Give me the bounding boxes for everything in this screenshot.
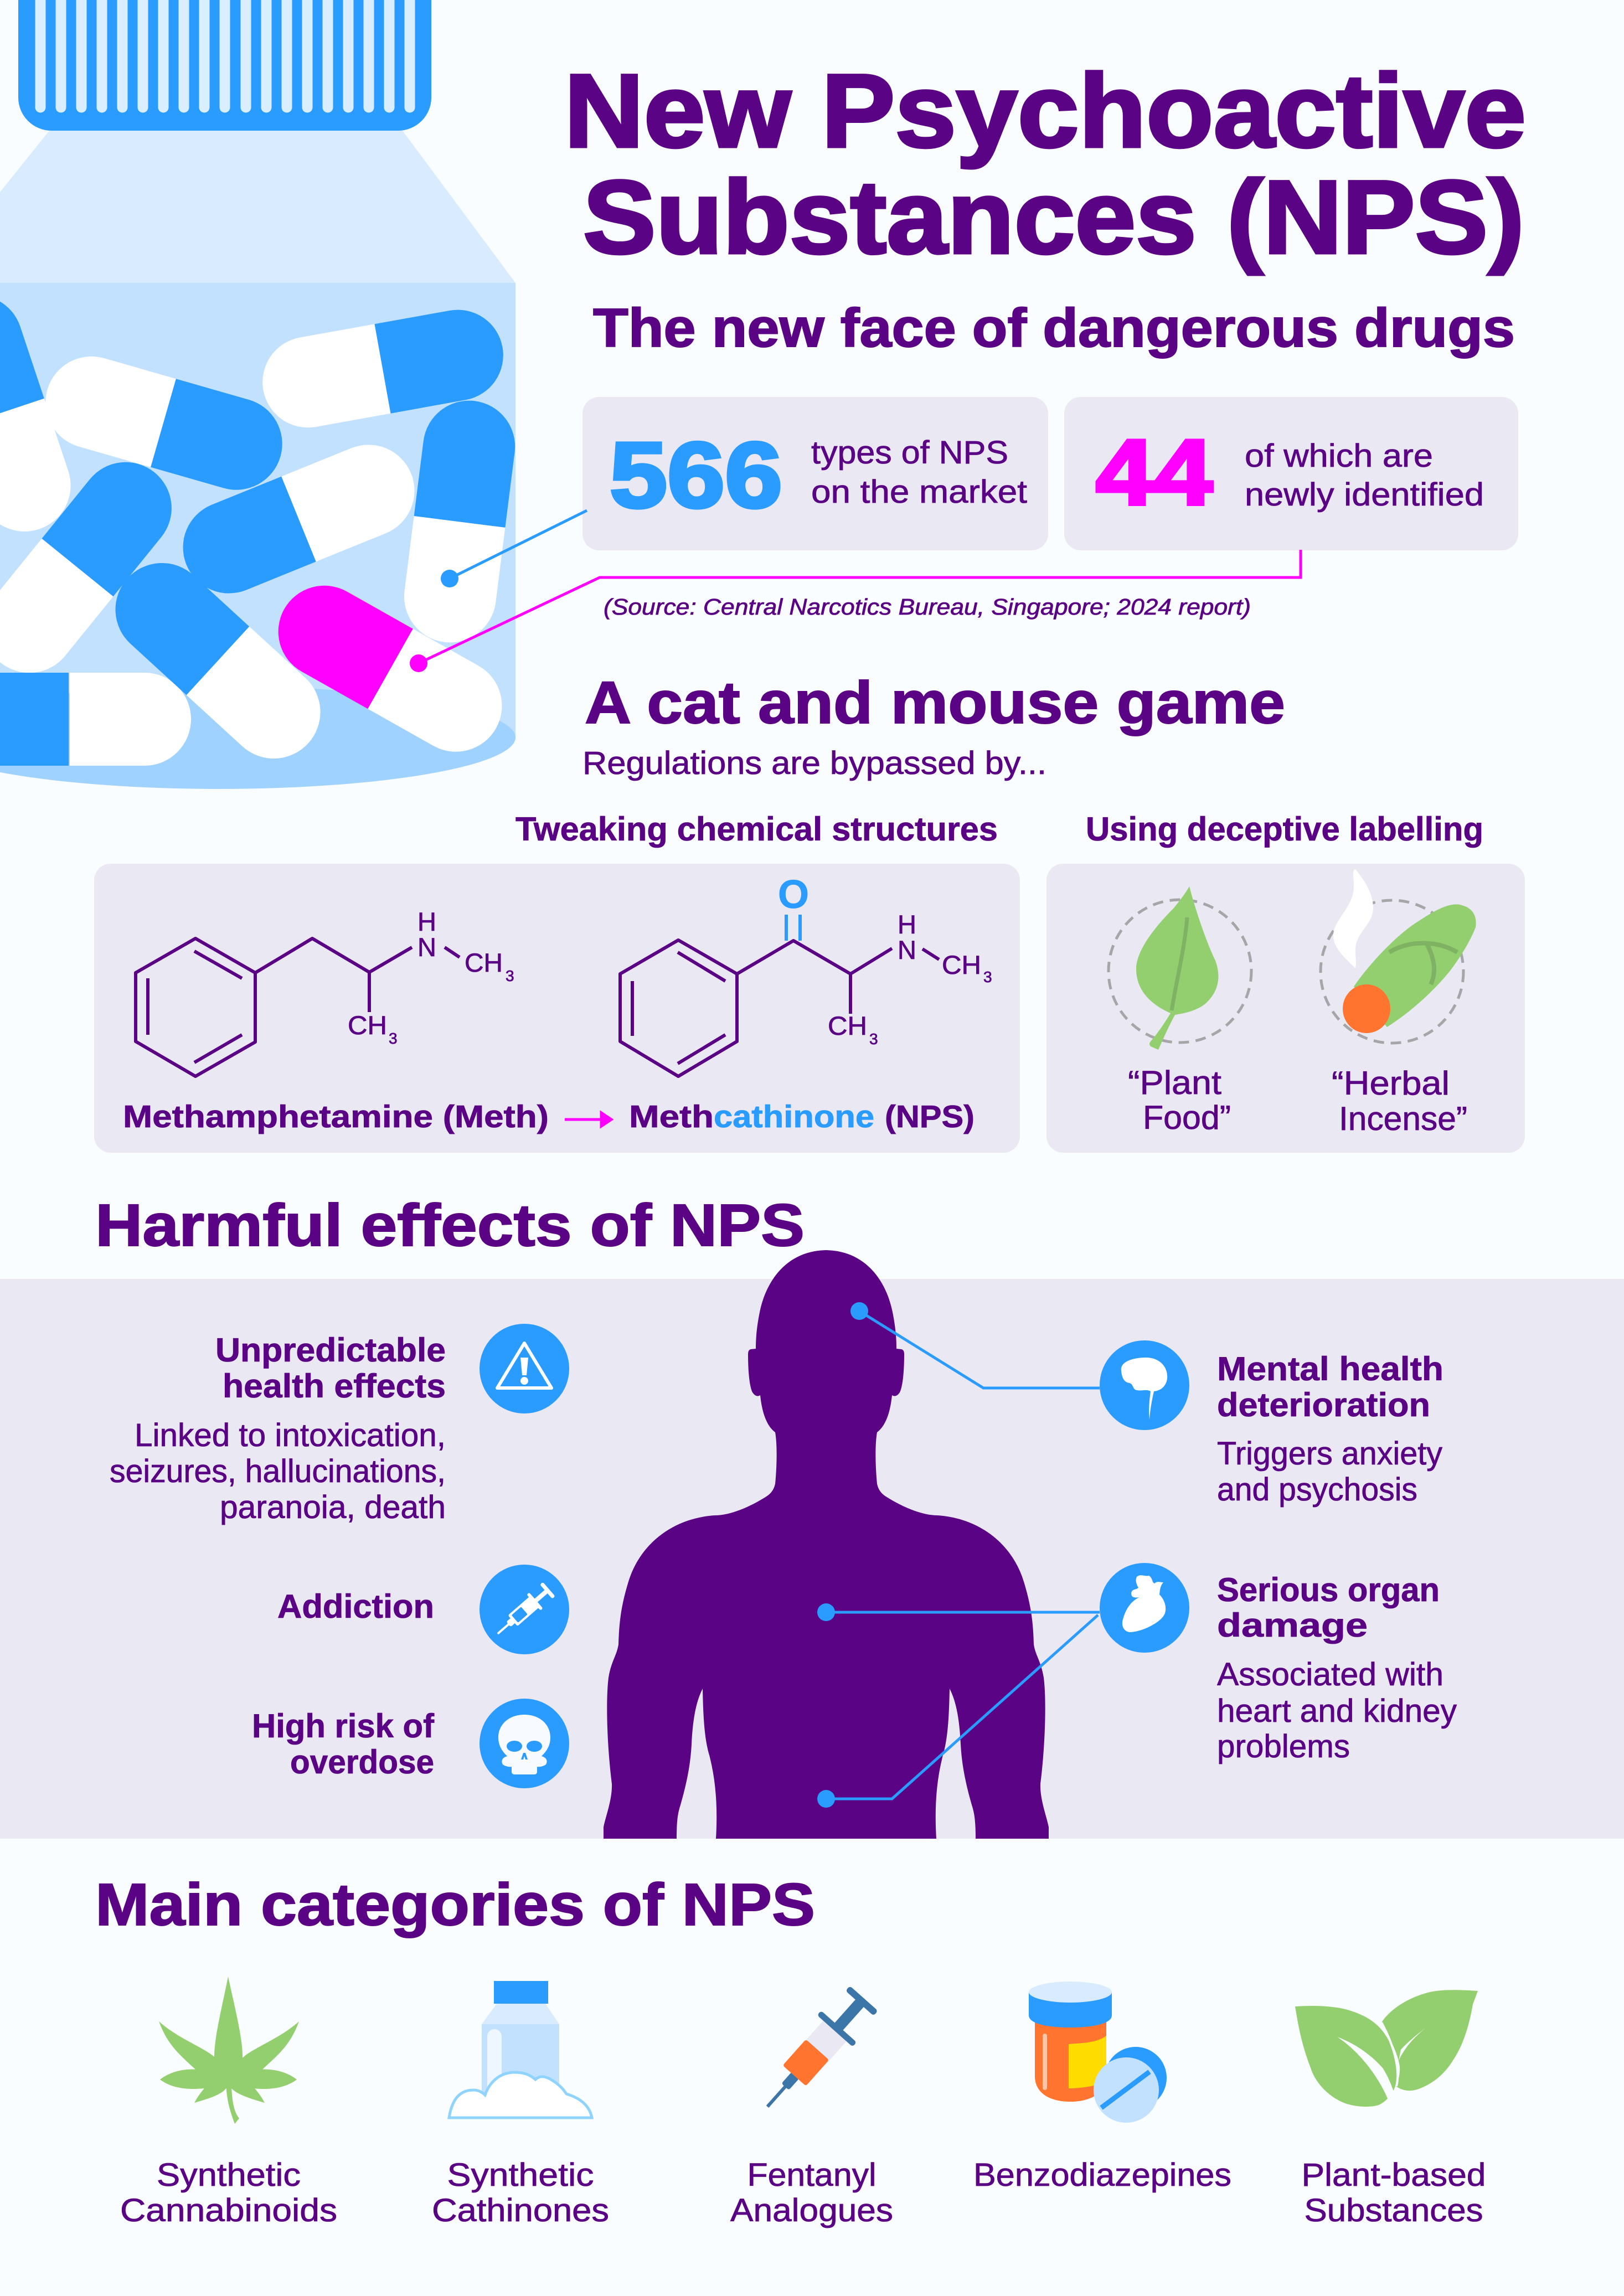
icon: cannabis leaf [159, 1977, 299, 2124]
callout line: blue capsule to 566 [441, 510, 587, 587]
subheading: chemical structures: Tweaking chemical structures [515, 811, 998, 848]
text: high risk of overdose: High risk of [252, 1707, 435, 1745]
label: methamphetamine: Methamphetamine (Meth) [123, 1099, 549, 1134]
molecule: methcathinone: H [898, 910, 916, 939]
capsule [399, 395, 520, 648]
title: New Psychoactive [564, 53, 1526, 169]
human silhouette [604, 1250, 1049, 1839]
molecule: methamphetamine: CH [348, 1010, 387, 1040]
panel: harmful effects band [0, 1279, 1624, 1839]
bottle shoulder [0, 131, 515, 283]
heading: harmful effects: Harmful effects of NPS [95, 1191, 805, 1258]
subtitle: The new face of dangerous drugs [593, 297, 1515, 358]
callout line: magenta capsule to 44 [410, 550, 1301, 672]
text: unpredictable health effects: seizures, hallucinations, [110, 1453, 446, 1489]
panel: deceptive labelling [1046, 864, 1525, 1153]
label: plant food: “Plant [1128, 1064, 1221, 1101]
label: methcathinone: cathinone [714, 1099, 874, 1134]
category: synthetic cannabinoids [120, 1977, 337, 2228]
text: serious organ damage: Serious organ [1217, 1571, 1440, 1608]
label [120, 2157, 337, 2228]
label: methcathinone: Meth [629, 1099, 714, 1134]
label: methcathinone: (NPS) [885, 1099, 975, 1134]
label: plant food [1128, 1064, 1231, 1136]
capsule [255, 302, 511, 435]
panel: 44 newly identified [1064, 397, 1518, 550]
caption: 44: newly identified [1245, 477, 1484, 513]
category: plant-based substances [1295, 1990, 1486, 2228]
icon: bottle with powder [449, 1981, 592, 2118]
molecule: methcathinone: 3 [983, 968, 992, 986]
label: Substances [1305, 2192, 1483, 2228]
caption: 566: types of NPS [811, 435, 1008, 471]
molecule: methcathinone: CH [942, 950, 981, 979]
molecule: methamphetamine: H [417, 907, 436, 936]
heading: main categories: Main categories of NPS [95, 1871, 815, 1938]
molecule: methamphetamine: CH [465, 948, 503, 977]
label: Fentanyl [747, 2157, 876, 2193]
icon: herbal incense [1321, 869, 1476, 1043]
text: serious organ damage: problems [1217, 1729, 1350, 1764]
capsule [0, 443, 190, 692]
icon: warning [480, 1324, 569, 1413]
bottle body [0, 283, 515, 737]
capsule [0, 673, 191, 766]
icon: heart [1100, 1563, 1189, 1653]
panel: chemical structures [94, 864, 1020, 1153]
bottle cap [18, 0, 431, 131]
molecule: methcathinone: 3 [869, 1030, 878, 1048]
capsule [96, 544, 339, 778]
label: Cannabinoids [120, 2192, 337, 2228]
label: Cathinones [432, 2192, 609, 2228]
icon: brain [1100, 1340, 1189, 1430]
icon: orange syringe [750, 1983, 881, 2123]
number: 44: 44 [1096, 420, 1213, 524]
text: high risk of overdose [252, 1707, 435, 1781]
intro text: Regulations are bypassed by... [582, 745, 1046, 781]
text: unpredictable health effects [110, 1332, 446, 1525]
molecule: methcathinone [620, 873, 992, 1076]
title: Substances (NPS) [583, 159, 1524, 275]
subheading: deceptive labelling: Using deceptive labelling [1086, 811, 1483, 848]
connector lines [817, 1302, 1100, 1808]
label: Synthetic [447, 2157, 594, 2193]
icon: pill bottle and tablet [1029, 1982, 1167, 2123]
source note: (Source: Central Narcotics Bureau, Singapore; 2024 report) [604, 594, 1251, 620]
label: Synthetic [157, 2157, 301, 2193]
label: Benzodiazepines [973, 2157, 1231, 2193]
molecule: methamphetamine: N [417, 932, 436, 962]
illustration: pill bottle [0, 0, 520, 789]
molecule: methcathinone: N [898, 935, 916, 964]
icon: two leaves [1295, 1990, 1478, 2108]
text: mental health deterioration: and psychosis [1217, 1472, 1417, 1508]
icon: skull [480, 1699, 569, 1788]
text: unpredictable health effects: health effects [223, 1368, 446, 1405]
text: unpredictable health effects: Linked to intoxication, [135, 1417, 446, 1453]
capsule [169, 431, 429, 607]
number: 566: 566 [610, 423, 782, 527]
text: high risk of overdose: overdose [290, 1743, 434, 1781]
panel: 566 types of NPS [582, 397, 1048, 550]
icon: plant food leaf [1109, 886, 1251, 1050]
label: Analogues [730, 2192, 893, 2228]
text: mental health deterioration: Mental health [1217, 1350, 1443, 1387]
molecule: methamphetamine: 3 [506, 967, 514, 984]
caption: 566: on the market [811, 474, 1027, 510]
molecule: methcathinone: CH [828, 1011, 867, 1040]
label: herbal incense: “Herbal [1332, 1065, 1450, 1102]
label: plant food: Food” [1143, 1099, 1231, 1136]
label [432, 2157, 609, 2228]
molecule: methamphetamine: 3 [389, 1030, 398, 1047]
caption: 44 [1245, 438, 1484, 513]
text: mental health deterioration: Triggers anxiety [1217, 1436, 1442, 1472]
text: serious organ damage: Associated with [1217, 1657, 1443, 1693]
text: unpredictable health effects: paranoia, death [220, 1489, 446, 1525]
heading: cat and mouse: A cat and mouse game [585, 669, 1285, 736]
label: herbal incense: Incense” [1339, 1100, 1467, 1137]
text: unpredictable health effects: Unpredictable [215, 1332, 446, 1369]
capsule [0, 283, 83, 544]
category: benzodiazepines [973, 1982, 1231, 2193]
label: herbal incense [1332, 1065, 1467, 1137]
bottle base [0, 686, 515, 789]
molecule: methcathinone: O [778, 873, 809, 917]
label [730, 2157, 893, 2228]
text: mental health deterioration: deterioration [1217, 1386, 1430, 1423]
category: fentanyl analogues [730, 1983, 893, 2228]
molecule: methamphetamine [136, 907, 514, 1076]
caption: 44: of which are [1245, 438, 1433, 474]
category: synthetic cathinones [432, 1981, 609, 2228]
label [1301, 2157, 1486, 2228]
caption: 566 [811, 435, 1027, 510]
title [564, 53, 1526, 275]
label: methcathinone [629, 1099, 975, 1134]
capsule [35, 345, 293, 501]
text: addiction: Addiction [277, 1588, 434, 1625]
text: serious organ damage [1217, 1571, 1457, 1764]
icon: syringe [480, 1565, 569, 1654]
text: serious organ damage: heart and kidney [1217, 1693, 1457, 1729]
arrow [565, 1113, 611, 1126]
capsule: magenta [262, 569, 519, 768]
label: Plant-based [1301, 2157, 1486, 2193]
text: serious organ damage: damage [1217, 1607, 1368, 1644]
text: mental health deterioration [1217, 1350, 1443, 1508]
